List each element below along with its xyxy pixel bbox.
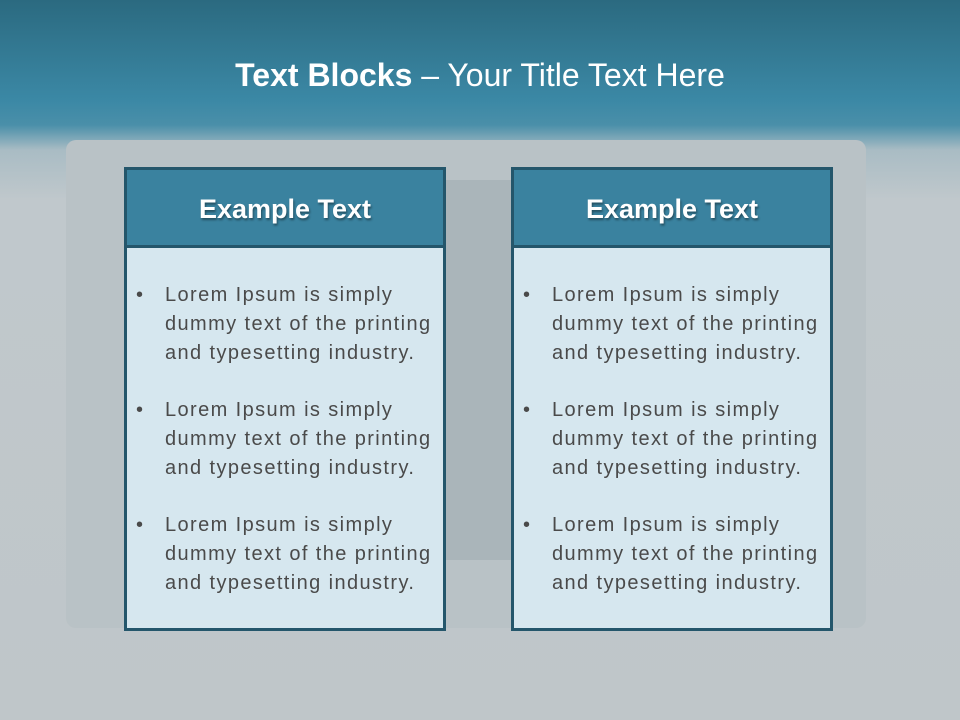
header: left: Example Text bbox=[199, 194, 371, 224]
bullet 2: dummy text of the printing bbox=[552, 428, 819, 450]
panel: left bbox=[124, 167, 446, 631]
bullet 3: dummy text of the printing bbox=[552, 543, 819, 565]
bullet 1: dummy text of the printing bbox=[552, 313, 819, 335]
bullet 2: and typesetting industry. bbox=[552, 457, 802, 479]
bullet 3: Lorem Ipsum is simply bbox=[552, 514, 780, 536]
bullet 1: and typesetting industry. bbox=[165, 342, 415, 364]
bullet 1 bbox=[552, 281, 842, 368]
bullet 2: Lorem Ipsum is simply bbox=[552, 399, 780, 421]
bullet 3: Lorem Ipsum is simply bbox=[165, 514, 393, 536]
bullet 2: dummy text of the printing bbox=[165, 428, 432, 450]
bullet 1: dummy text of the printing bbox=[165, 313, 432, 335]
bullet 3 bbox=[165, 511, 455, 598]
bullet 2 bbox=[165, 396, 455, 483]
bullet 2: Lorem Ipsum is simply bbox=[165, 399, 393, 421]
panel: right bbox=[511, 167, 833, 631]
header: right bbox=[514, 170, 830, 248]
bullet 2 bbox=[552, 396, 842, 483]
bullet 1: Lorem Ipsum is simply bbox=[552, 284, 780, 306]
bullet 1 bbox=[165, 281, 455, 368]
bullet 1: Lorem Ipsum is simply bbox=[165, 284, 393, 306]
header: left bbox=[127, 170, 443, 248]
bullet 2: and typesetting industry. bbox=[165, 457, 415, 479]
bullet 3: and typesetting industry. bbox=[552, 572, 802, 594]
title: Text Blocks – Your Title Text Here bbox=[235, 57, 725, 93]
header: right: Example Text bbox=[586, 194, 758, 224]
bullet 1: and typesetting industry. bbox=[552, 342, 802, 364]
bullet 3: dummy text of the printing bbox=[165, 543, 432, 565]
bullet 3: and typesetting industry. bbox=[165, 572, 415, 594]
bullet 3 bbox=[552, 511, 842, 598]
